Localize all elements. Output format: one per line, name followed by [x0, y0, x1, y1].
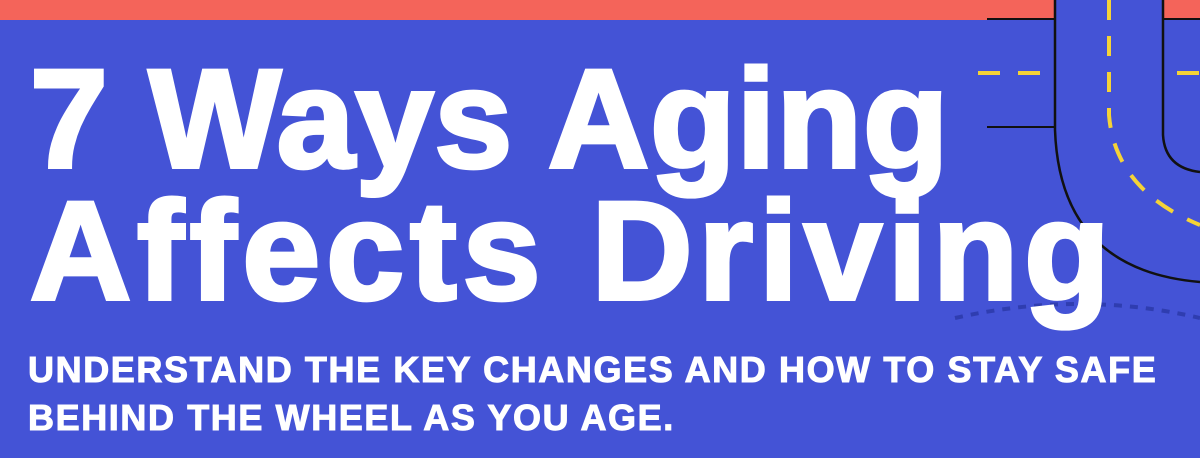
title: 7 Ways Aging: [30, 40, 950, 197]
top red band: [0, 0, 1200, 20]
subtitle: BEHIND THE WHEEL AS YOU AGE.: [28, 397, 675, 438]
title: Affects Driving: [30, 172, 1116, 329]
subtitle: UNDERSTAND THE KEY CHANGES AND HOW TO STAY SAFE: [28, 349, 1157, 390]
title: [30, 40, 1116, 331]
subtitle: [28, 349, 1157, 438]
